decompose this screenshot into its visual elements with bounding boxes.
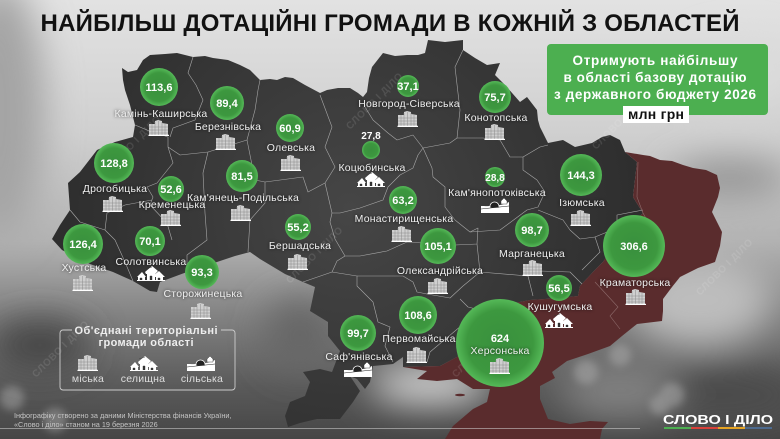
community: Олександрійська: Олександрійська (397, 265, 483, 277)
community: Березнівська: 89,4 (216, 98, 239, 110)
legend: громади області (98, 337, 194, 349)
community: Новгород-Сіверська: Новгород-Сіверська (358, 98, 460, 110)
community: Олександрійська: 105,1 (424, 241, 452, 253)
community: Монастирищенська: 63,2 (392, 195, 414, 207)
watermarks: СЛОВО І ДІЛО (590, 91, 652, 152)
community: Дрогобицька: 128,8 (100, 158, 128, 170)
community: Кременецька: Кременецька (139, 199, 205, 211)
community: Кам'янець-Подільська: 81,5 (231, 171, 253, 183)
community: Ізюмська: Ізюмська (559, 197, 605, 209)
community: Олевська: Олевська (267, 142, 315, 154)
watermarks: СЛОВО І ДІЛО (450, 319, 512, 380)
community: Первомайська: 108,6 (404, 310, 432, 322)
community: Камінь-Каширська: 113,6 (146, 82, 172, 94)
community: Херсонська: Херсонська (470, 345, 530, 357)
community: Хустська: Хустська (62, 262, 106, 274)
community: Сторожинецька: 93,3 (191, 267, 213, 279)
community: Марганецька (499, 213, 565, 276)
community: Солотвинська: 70,1 (139, 236, 161, 248)
community: Монастирищенська (355, 186, 453, 242)
community: Саф'янівська (325, 315, 393, 377)
community: Березнівська (195, 86, 261, 150)
watermarks: СЛОВО І ДІЛО (102, 114, 164, 175)
community: Дрогобицька: Дрогобицька (83, 183, 147, 195)
legend (60, 325, 235, 390)
community: Бершадська: Бершадська (269, 240, 331, 252)
community: Конотопська: Конотопська (464, 112, 528, 124)
community: Кушугумська: Кушугумська (528, 301, 592, 313)
community: Новгород-Сіверська (358, 75, 460, 127)
community: Бершадська: 55,2 (287, 222, 309, 234)
community: Кам'янець-Подільська: Кам'янець-Подільська (187, 192, 299, 204)
community: Ізюмська (559, 154, 605, 226)
community: Марганецька: Марганецька (499, 248, 565, 260)
community: Хустська: 126,4 (69, 239, 98, 251)
community: Монастирищенська: Монастирищенська (355, 213, 453, 225)
community: Бершадська (269, 214, 331, 270)
community: Коцюбинська: 27,8 (361, 131, 381, 142)
community: Дрогобицька (83, 143, 147, 212)
community: Солотвинська: Солотвинська (116, 256, 186, 268)
community: Кам'янець-Подільська (187, 160, 299, 221)
community: Саф'янівська: 99,7 (347, 328, 369, 340)
community: Березнівська: Березнівська (195, 121, 261, 133)
watermarks (30, 71, 756, 380)
community: Краматорська (600, 215, 670, 305)
legend: селищна (121, 373, 165, 385)
panel: subtitle callout: в області базову дотацію (564, 70, 746, 85)
community: Саф'янівська: Саф'янівська (325, 351, 393, 363)
map: occupied territory (403, 152, 722, 439)
map: oblast borders (70, 50, 643, 362)
panel: subtitle callout (547, 44, 768, 123)
legend: міська (72, 373, 104, 385)
watermarks: СЛОВО І ДІЛО (30, 319, 92, 380)
community: Кам'янопотоківська: Кам'янопотоківська (448, 187, 546, 199)
community: Кам'янопотоківська (448, 167, 546, 213)
community: Камінь-Каширська: Камінь-Каширська (115, 108, 207, 120)
community: Хустська (62, 224, 106, 291)
watermarks: СЛОВО І ДІЛО (694, 237, 756, 298)
community: Новгород-Сіверська: 37,1 (397, 81, 419, 93)
panel: subtitle callout: Отримують найбільшу (572, 53, 738, 68)
legend: Об'єднані територіальні (74, 325, 218, 337)
community: Конотопська: 75,7 (484, 92, 506, 104)
watermarks: СЛОВО І ДІЛО (284, 225, 346, 286)
map: government-controlled territory of Ukraine (52, 40, 643, 427)
community: Конотопська (464, 81, 528, 140)
community: Кременецька: 52,6 (160, 184, 182, 196)
community: Херсонська (456, 299, 544, 387)
community: Олевська (267, 114, 315, 171)
panel: subtitle callout: млн грн (628, 106, 684, 122)
community: Солотвинська (116, 226, 186, 281)
community: Кам'янопотоківська: 28,8 (485, 173, 505, 184)
community: Первомайська (382, 296, 456, 363)
community: Коцюбинська (338, 131, 406, 187)
watermarks: СЛОВО І ДІЛО (344, 71, 406, 132)
community: Первомайська: Первомайська (382, 333, 456, 345)
community: Камінь-Каширська (115, 68, 207, 136)
footnote: Інфографіку створено за даними Міністерства фінансів України, (14, 411, 231, 420)
community: Олександрійська (397, 228, 483, 294)
legend: сільська (181, 373, 223, 385)
community: Кременецька (139, 176, 205, 226)
community: Марганецька: 98,7 (521, 225, 543, 237)
footnote (14, 411, 231, 429)
community: Краматорська: 306,6 (620, 241, 648, 253)
title: НАЙБІЛЬШ ДОТАЦІЙНІ ГРОМАДИ В КОЖНІЙ З ОБЛАСТЕЙ (40, 9, 740, 37)
community: Кушугумська: 56,5 (548, 283, 570, 295)
community: Ізюмська: 144,3 (567, 170, 595, 182)
community: Краматорська: Краматорська (600, 277, 670, 289)
community: Олевська: 60,9 (279, 123, 301, 135)
community: Коцюбинська: Коцюбинська (338, 162, 406, 174)
logo: Слово і діло: СЛОВО І ДІЛО (663, 412, 773, 427)
panel: subtitle callout: з державного бюджету 2026 (554, 87, 756, 102)
footnote: «Слово і діло» станом на 19 березня 2026 (14, 420, 158, 429)
community: Херсонська: 624 (491, 333, 510, 345)
horizontal floor line (0, 427, 640, 430)
community: Кушугумська (528, 275, 592, 328)
community: Сторожинецька (164, 255, 242, 319)
community: Сторожинецька: Сторожинецька (164, 288, 242, 300)
